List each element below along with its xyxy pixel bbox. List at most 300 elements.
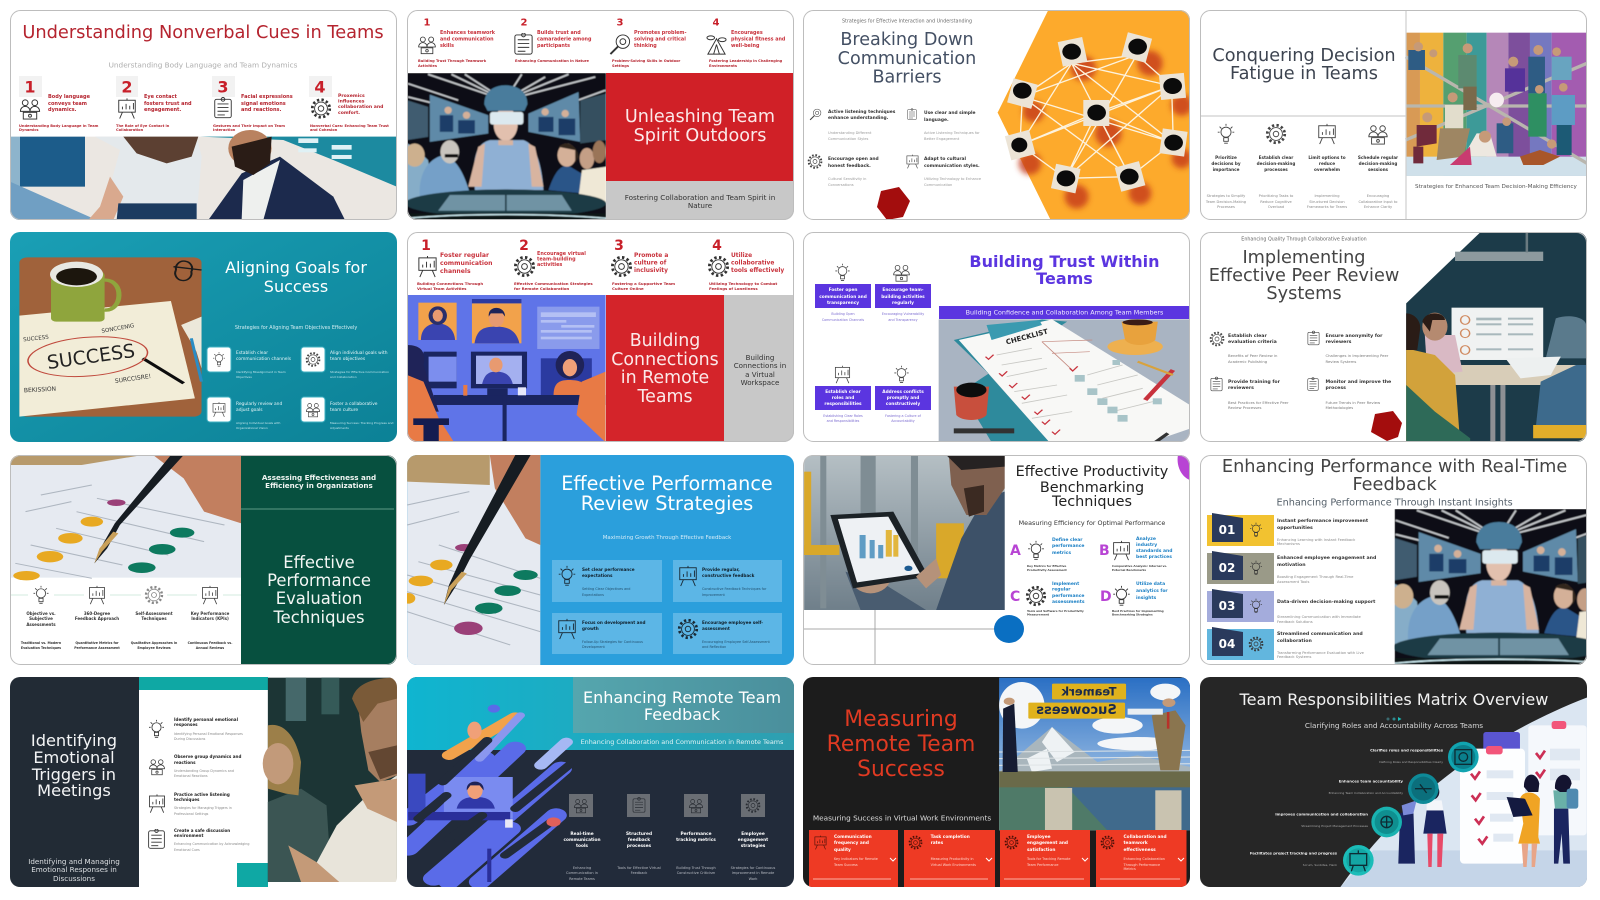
numbered item 1: 1 xyxy=(24,78,36,96)
numbered item 1: 1 xyxy=(424,18,431,28)
numbered item 1: Body language xyxy=(48,94,91,100)
responsibility 2: Enhances team accountability xyxy=(1339,778,1404,784)
numbered item 4 xyxy=(309,76,389,132)
title: Barriers xyxy=(872,68,942,88)
trigger item 1: responses xyxy=(174,722,198,726)
numbered item 3: Fostering a Supportive Team xyxy=(612,280,675,286)
review card 1 xyxy=(552,560,662,602)
metric D: Benchmarking Strategies xyxy=(1112,612,1153,616)
title: Enhancing Remote Team xyxy=(583,688,781,706)
strategy 1: Communication Styles xyxy=(828,137,868,141)
numbered item 2: engagement. xyxy=(144,107,181,113)
numbered item 2: Eye contact xyxy=(144,94,177,100)
trigger item 2: Observe group dynamics and xyxy=(174,754,241,758)
photo: notebook with success sketch and green mug: SUCCESS xyxy=(23,335,50,343)
decorative red hexagon xyxy=(1371,411,1402,441)
title: Success xyxy=(857,756,945,782)
numbered item 3: Facial expressions xyxy=(241,94,293,100)
KPI card 4: Through Performance xyxy=(1122,863,1160,867)
metric C xyxy=(1010,580,1085,616)
trust item 2: regularly xyxy=(892,300,914,306)
metric D: insights xyxy=(1136,594,1157,600)
subtitle: Clarifying Roles and Accountability Across Teams xyxy=(1305,721,1483,730)
panel: Identifying Emotional Triggers in Meetings xyxy=(10,677,397,887)
divider lines xyxy=(1200,10,1406,220)
column 1: Processes xyxy=(1217,205,1235,209)
numbered item 4 xyxy=(707,18,786,68)
review card 3: Focus on development and xyxy=(582,620,645,624)
numbered item 4: Encourages xyxy=(731,30,763,36)
column 2: decision-making xyxy=(1257,160,1295,166)
tool column 1: Remote Teams xyxy=(569,877,595,881)
panel: Aligning Goals for Success xyxy=(10,232,397,442)
numbered item 1: skills xyxy=(440,43,454,49)
numbered item 2: The Role of Eye Contact in xyxy=(116,124,170,128)
title: Team Responsibilities Matrix Overview xyxy=(1239,690,1548,709)
review item 1: Academic Publishing xyxy=(1228,358,1268,364)
trust item 3: roles and xyxy=(832,394,854,400)
grey subtitle block: a Virtual xyxy=(745,370,775,378)
technique 2: Quantitative Metrics for xyxy=(75,641,119,645)
review card 4: and Reflection xyxy=(702,645,726,649)
strategy 3: honest feedback. xyxy=(828,162,871,168)
illustration: remote worker in diagonal stripes xyxy=(408,705,569,882)
technique 4: Indicators (KPIs) xyxy=(191,616,229,620)
tool column 1: communication xyxy=(563,836,601,842)
responsibility 4 xyxy=(1250,850,1338,867)
illustration: remote video call xyxy=(407,295,606,442)
strategy 2: Use clear and simple xyxy=(924,110,976,116)
review item 4: process xyxy=(1326,384,1346,390)
step 01: 01 xyxy=(1219,523,1235,537)
numbered item 1: 1 xyxy=(421,238,431,254)
tool column 2: feedback xyxy=(628,836,650,842)
step 03: Data-driven decision-making support xyxy=(1277,598,1376,604)
numbered item 3: and reactions. xyxy=(241,107,282,113)
technique 2 xyxy=(74,583,120,650)
numbered item 2: Effective Communication Strategies xyxy=(514,280,593,286)
numbered item 2: activities xyxy=(537,262,562,268)
trigger item 4 xyxy=(149,828,249,852)
green panel title: Evaluation xyxy=(276,588,362,608)
technique 4 xyxy=(188,583,232,650)
numbered item 1 xyxy=(19,76,99,132)
strategy 2 xyxy=(908,108,980,141)
numbered item 1 xyxy=(417,238,493,290)
responsibility 4: Scrum, Sunbites, Hank xyxy=(1303,863,1337,867)
column 2: Prioritizing Tasks to xyxy=(1259,194,1293,198)
title: Effective Productivity xyxy=(1016,464,1169,480)
photo: tense discussion between two colleagues xyxy=(263,678,397,882)
numbered item 4: comfort. xyxy=(338,110,360,116)
goal item 4: Measuring Success: Tracking Progress and xyxy=(330,421,394,425)
panel: Building Connections in Remote Teams xyxy=(407,232,794,442)
goal item 4: team culture xyxy=(330,406,358,412)
title: Communication xyxy=(838,49,976,69)
panel: Effective Performance Evaluation Techniques xyxy=(10,455,397,665)
title: Systems xyxy=(1266,284,1342,304)
photo: notebook with success sketch and green mug: SUCCESS xyxy=(46,340,136,374)
strategy 2: language. xyxy=(924,116,949,122)
trust item 2: building activities xyxy=(881,294,925,300)
grey subtitle block: Fostering Collaboration and Team Spirit in xyxy=(625,192,775,202)
review item 4: Monitor and improve the xyxy=(1326,378,1391,384)
numbered item 2: team-building xyxy=(537,256,576,262)
step 04: Transforming Performance Evaluation with Live xyxy=(1276,651,1365,655)
review item 3 xyxy=(1211,377,1289,410)
trust item 4: Accountability xyxy=(891,419,915,423)
numbered item 3: Culture Online xyxy=(612,286,644,290)
photo: colleagues reviewing charts in meeting room xyxy=(1406,232,1591,445)
KPI card 2: rates xyxy=(931,840,944,846)
trust item 2: and Transparency xyxy=(888,318,918,322)
red title block: Teams xyxy=(636,387,693,407)
trust item 1: transparency xyxy=(827,300,859,306)
strategy 4: Communication xyxy=(924,183,952,187)
tool column 4: Work xyxy=(749,877,758,881)
title: Fatigue in Teams xyxy=(1230,64,1378,84)
red title block: Spirit Outdoors xyxy=(634,126,766,146)
numbered item 4: 4 xyxy=(713,18,720,28)
numbered item 3: signal emotions xyxy=(241,101,286,107)
goal item 3: adjust goals xyxy=(236,406,263,412)
header caption: Strategies for Effective Interaction and Understanding xyxy=(842,18,972,24)
review card 4: Encourage employee self- xyxy=(702,620,763,624)
technique 2: Performance Assessment xyxy=(74,646,120,650)
grid lines xyxy=(803,610,1003,665)
metric A: metrics xyxy=(1052,550,1071,556)
column 4: Collaborative Input to xyxy=(1358,200,1398,204)
column 4: Encouraging xyxy=(1367,194,1389,198)
title: Benchmarking xyxy=(1040,480,1144,496)
dark title panel: Emotional Responses in xyxy=(31,864,117,874)
tool column 2 xyxy=(616,794,661,875)
title: Implementing xyxy=(1242,248,1366,268)
strategy 2: Better Engagement xyxy=(924,137,960,141)
metric B: B xyxy=(1099,543,1110,559)
title: Success xyxy=(264,276,328,296)
numbered item 3: 3 xyxy=(617,18,624,28)
title: Building Trust Within xyxy=(969,252,1160,270)
numbered item 3 xyxy=(212,76,293,132)
trust item 1: Foster open xyxy=(829,286,857,292)
review item 3: Provide training for xyxy=(1228,378,1281,384)
strategy 4: communication styles. xyxy=(924,162,980,168)
trigger item 3: Practice active listening xyxy=(174,792,230,796)
panel: Building Trust Within Teams xyxy=(803,232,1201,443)
responsibility 3: Streamlining Project Management Processes xyxy=(1301,824,1368,828)
review card 1: Set clear performance xyxy=(582,566,635,572)
review card 3: Follow-Up Strategies for Continuous xyxy=(582,640,643,644)
goal item 2 xyxy=(301,347,389,379)
dark title panel: Meetings xyxy=(37,780,111,800)
numbered item 4: 4 xyxy=(712,238,722,254)
KPI card 1: Key Indicators for Remote xyxy=(834,857,878,861)
column 4: Schedule regular xyxy=(1358,154,1399,160)
KPI card 2: Measuring Productivity in xyxy=(931,857,974,861)
trust item 3: Establish clear xyxy=(825,388,862,394)
numbered item 1: Activities xyxy=(418,64,437,68)
trigger item 1: During Discussions xyxy=(174,737,206,741)
panel: Implementing Effective Peer Review Systems xyxy=(1200,232,1591,445)
KPI card 4: Metrics xyxy=(1124,867,1136,871)
KPI card 4: Collaboration and xyxy=(1124,834,1167,840)
responsibility 3: Improves communication and collaboration xyxy=(1275,812,1368,816)
step 01: Mechanisms xyxy=(1277,542,1300,546)
numbered item 1: dynamics. xyxy=(48,107,77,113)
column 3: reduce xyxy=(1319,160,1335,166)
numbered item 3: Promote a xyxy=(634,253,668,259)
metric C: C xyxy=(1010,589,1020,605)
red title block: Connections xyxy=(611,350,719,370)
dark title panel: Discussions xyxy=(53,874,95,882)
mirrored sign text xyxy=(1036,684,1117,718)
step 02: Assessment Tools xyxy=(1277,580,1309,584)
numbered item 4: Environments xyxy=(709,64,737,68)
KPI card 4: teamwork xyxy=(1124,840,1148,846)
metric B: External Benchmarks xyxy=(1112,568,1146,572)
panel: Understanding Nonverbal Cues in Teams xyxy=(10,10,397,220)
trigger item 2: reactions xyxy=(174,760,196,764)
numbered item 4: physical fitness and xyxy=(731,36,786,42)
title: Aligning Goals for xyxy=(225,258,367,276)
KPI card 3 xyxy=(1000,830,1090,887)
title: Effective Performance xyxy=(561,472,773,494)
trust item 1: Building Open xyxy=(831,312,855,316)
dark title panel: Triggers in xyxy=(31,764,116,784)
step 04: Streamlined communication and xyxy=(1277,630,1363,636)
tool column 2: Feedback xyxy=(631,871,648,875)
numbered item 4 xyxy=(709,238,784,290)
numbered item 2: for Remote Collaboration xyxy=(514,286,570,290)
photo: pen marking a rating form xyxy=(401,455,540,665)
review card 2: Provide regular, xyxy=(702,566,740,572)
photo: woman with headset and team at a holographic table xyxy=(1394,509,1587,665)
numbered item 4: Fostering Leadership in Challenging xyxy=(709,59,783,63)
numbered item 3: 3 xyxy=(614,238,624,254)
panel: Effective Productivity Benchmarking Techniques xyxy=(803,455,1190,665)
tool column 4: Strategies for Continuous xyxy=(731,866,776,870)
tool column 4: engagement xyxy=(738,836,768,842)
column 2: Overload xyxy=(1268,205,1284,209)
numbered item 1: Foster regular xyxy=(440,252,489,258)
title: Breaking Down xyxy=(840,30,974,50)
responsibility 1 xyxy=(1370,748,1444,764)
red title block: in Remote xyxy=(621,368,709,388)
numbered item 2: Collaboration xyxy=(116,128,144,132)
tool column 1: tools xyxy=(576,842,588,848)
metric C: Measurement xyxy=(1027,612,1050,616)
goal item 3 xyxy=(207,397,282,430)
metric D: D xyxy=(1100,589,1112,605)
numbered item 1: Understanding Body Language in Team xyxy=(19,124,99,128)
column 1: importance xyxy=(1213,166,1240,172)
photo: notebook with success sketch and green mug: BEKISSION xyxy=(24,386,56,394)
trigger item 2 xyxy=(150,754,241,778)
photo: colleagues pointing at a screen xyxy=(10,130,397,220)
photo: engineer holding tablet in factory xyxy=(804,455,1005,610)
responsibility 1: Defining Roles and Responsibilities Clearly xyxy=(1379,760,1443,764)
strategy 3: Conversations xyxy=(828,183,854,187)
review card 3: growth xyxy=(582,626,599,630)
title: Understanding Nonverbal Cues in Teams xyxy=(22,22,384,43)
numbered item 4: and Cohesion xyxy=(310,128,338,132)
title: Effective Peer Review xyxy=(1209,266,1399,286)
tool column 2: Tools for Effective Virtual xyxy=(616,866,661,870)
column 3: Frameworks for Teams xyxy=(1307,205,1347,209)
numbered item 4: Proxemics xyxy=(338,92,365,98)
numbered item 4: collaborative xyxy=(731,260,774,266)
review item 2 xyxy=(1308,331,1389,364)
column 4: decision-making xyxy=(1359,160,1397,166)
goal item 4: Adjustments xyxy=(330,426,349,430)
blue circle accent xyxy=(994,615,1024,643)
technique 2: 360-Degree xyxy=(84,610,110,616)
review item 1 xyxy=(1211,332,1278,364)
tool column 1: Communication in xyxy=(566,871,598,875)
review card 4: Encouraging Employee Self-Assessment xyxy=(702,640,771,644)
column 4: Enhance Clarity xyxy=(1364,205,1393,209)
KPI card 2 xyxy=(904,830,995,887)
numbered item 1: Building Trust Through Teamwork xyxy=(418,59,487,63)
goal item 1: communication channels xyxy=(236,356,292,362)
column 3 xyxy=(1307,124,1347,209)
grey subtitle block: Nature xyxy=(688,200,713,210)
green panel subtitle: Efficiency in Organizations xyxy=(265,480,373,490)
column 4: sessions xyxy=(1368,166,1389,172)
strategy 4: Adapt to cultural xyxy=(924,156,967,162)
numbered item 3: Interaction xyxy=(213,128,236,132)
photo: notebook with success sketch and green mug xyxy=(19,257,202,417)
step 02: Enhanced employee engagement and xyxy=(1277,554,1376,560)
step 02: motivation xyxy=(1277,562,1306,568)
numbered item 4: tools effectively xyxy=(731,268,784,274)
trigger item 4: environment xyxy=(174,832,203,838)
numbered item 4: Nonverbal Cues: Enhancing Team Trust xyxy=(310,124,389,128)
KPI card 1 xyxy=(809,830,898,887)
step 03 xyxy=(1207,589,1376,624)
metric A: Productivity Assessment xyxy=(1027,568,1067,572)
trigger item 3: Professional Settings xyxy=(174,812,209,816)
step 01: Enhancing Learning with Instant Feedback xyxy=(1277,538,1356,542)
goal item 3: Regularly review and xyxy=(236,400,282,406)
strategy 2: Active Listening Techniques for xyxy=(924,131,980,135)
trigger item 4: Create a safe discussion xyxy=(174,828,230,832)
panel: Conquering Decision Fatigue in Teams xyxy=(1200,10,1587,220)
trigger item 4: Emotional Cues xyxy=(174,848,200,852)
responsibility 2: Enhancing Team Collaboration and Accountability xyxy=(1329,791,1403,795)
illustration: team with oversized checklists xyxy=(1340,697,1588,888)
metric B: Analyze xyxy=(1136,536,1156,542)
numbered item 1: Virtual Team Activities xyxy=(417,286,467,290)
metric C: Implement xyxy=(1052,580,1080,586)
goal item 1: Identifying Misalignment in Team xyxy=(236,370,286,374)
review card 2: Constructive Feedback Techniques for xyxy=(702,587,767,591)
photo: woman with headset and team at a holographic table xyxy=(407,73,606,220)
numbered item 3: Gestures and Their Impact on Team xyxy=(213,124,285,128)
trust item 4: constructively xyxy=(886,400,920,406)
review item 1: Benefits of Peer Review in xyxy=(1228,352,1278,358)
numbered item 3: Problem-Solving Skills in Outdoor xyxy=(612,59,681,63)
photo: two people on bridge with mirrored sign xyxy=(999,678,1198,830)
numbered item 2: participants xyxy=(537,43,570,49)
technique 1 xyxy=(21,583,62,650)
green panel subtitle: Assessing Effectiveness and xyxy=(262,472,376,482)
red title block xyxy=(606,295,724,442)
trust item 3 xyxy=(815,366,871,423)
strategy 4: Utilizing Technology to Enhance xyxy=(924,177,982,181)
step 01: Instant performance improvement xyxy=(1277,518,1369,524)
step 03: 03 xyxy=(1219,599,1235,613)
numbered item 3: culture of xyxy=(634,260,667,266)
numbered item 3: Settings xyxy=(612,64,629,68)
technique 4: Key Performance xyxy=(191,610,230,616)
review card 2 xyxy=(673,560,782,602)
review item 1: evaluation criteria xyxy=(1228,338,1277,344)
title: Teams xyxy=(1036,268,1093,288)
tool column 2: processes xyxy=(627,842,652,848)
step 04 xyxy=(1207,627,1365,660)
teal accents xyxy=(139,677,268,887)
strategy 1 xyxy=(810,108,896,141)
review card 1: expectations xyxy=(582,572,613,578)
subtitle: Maximizing Growth Through Effective Feedback xyxy=(603,535,732,541)
review card 2: Improvement xyxy=(702,593,725,597)
numbered item 2 xyxy=(515,18,592,63)
technique 3 xyxy=(131,583,178,650)
step 04: collaboration xyxy=(1277,638,1312,644)
grey subtitle block xyxy=(606,181,794,220)
review item 4 xyxy=(1308,378,1391,410)
column 1 xyxy=(1205,124,1246,209)
metric B xyxy=(1099,536,1172,572)
technique 1: Evaluation Techniques xyxy=(21,646,61,650)
review item 1: Establish clear xyxy=(1228,332,1267,338)
numbered item 2: Builds trust and xyxy=(537,30,581,36)
red title block: Building xyxy=(630,331,700,351)
photo: checklist on clipboard with coffee xyxy=(939,319,1201,443)
numbered item 1: and communication xyxy=(440,36,494,42)
numbered item 3: inclusivity xyxy=(634,268,668,274)
technique 3: Qualitative Approaches in xyxy=(131,641,178,645)
panel: Team Responsibilities Matrix Overview xyxy=(1200,677,1588,888)
photo: checklist on clipboard with coffee: CHECKLIST xyxy=(1005,327,1049,346)
subtitle: Understanding Body Language and Team Dynamics xyxy=(109,60,298,70)
subtitle: Measuring Success in Virtual Work Environments xyxy=(813,814,991,822)
step 01: opportunities xyxy=(1277,524,1313,530)
subtitle band: Building Confidence and Collaboration Among Team Members xyxy=(966,308,1164,316)
trust item 2 xyxy=(875,265,931,322)
subtitle: Enhancing Performance Through Instant Insights xyxy=(1276,498,1513,508)
numbered item 3: solving and critical xyxy=(634,36,686,42)
goal item 3: Aligning Individual Goals with xyxy=(236,421,280,425)
numbered item 1: communication xyxy=(440,260,493,266)
KPI card 3: Tools for Tracking Remote xyxy=(1026,857,1070,861)
KPI card 3: satisfaction xyxy=(1027,846,1055,852)
photo: notebook with success sketch and green mug: SURCCISRE! xyxy=(114,373,152,385)
step 02 xyxy=(1207,551,1376,584)
mirrored sign text: Teamerk xyxy=(1061,684,1116,698)
goal item 1: Objectives xyxy=(236,375,252,379)
title: Techniques xyxy=(1051,494,1132,510)
step 02: Boosting Engagement Through Real-Time xyxy=(1277,575,1354,579)
trust item 2: Encouraging Vulnerability xyxy=(882,312,924,316)
technique 1: Subjective xyxy=(29,616,53,620)
review item 2: Challenges in Implementing Peer xyxy=(1326,352,1389,358)
goal item 2: and Collaboration xyxy=(330,375,357,379)
responsibility 3 xyxy=(1275,812,1368,828)
photo: notebook with success sketch and green mug: SONCCENIG xyxy=(101,323,135,335)
